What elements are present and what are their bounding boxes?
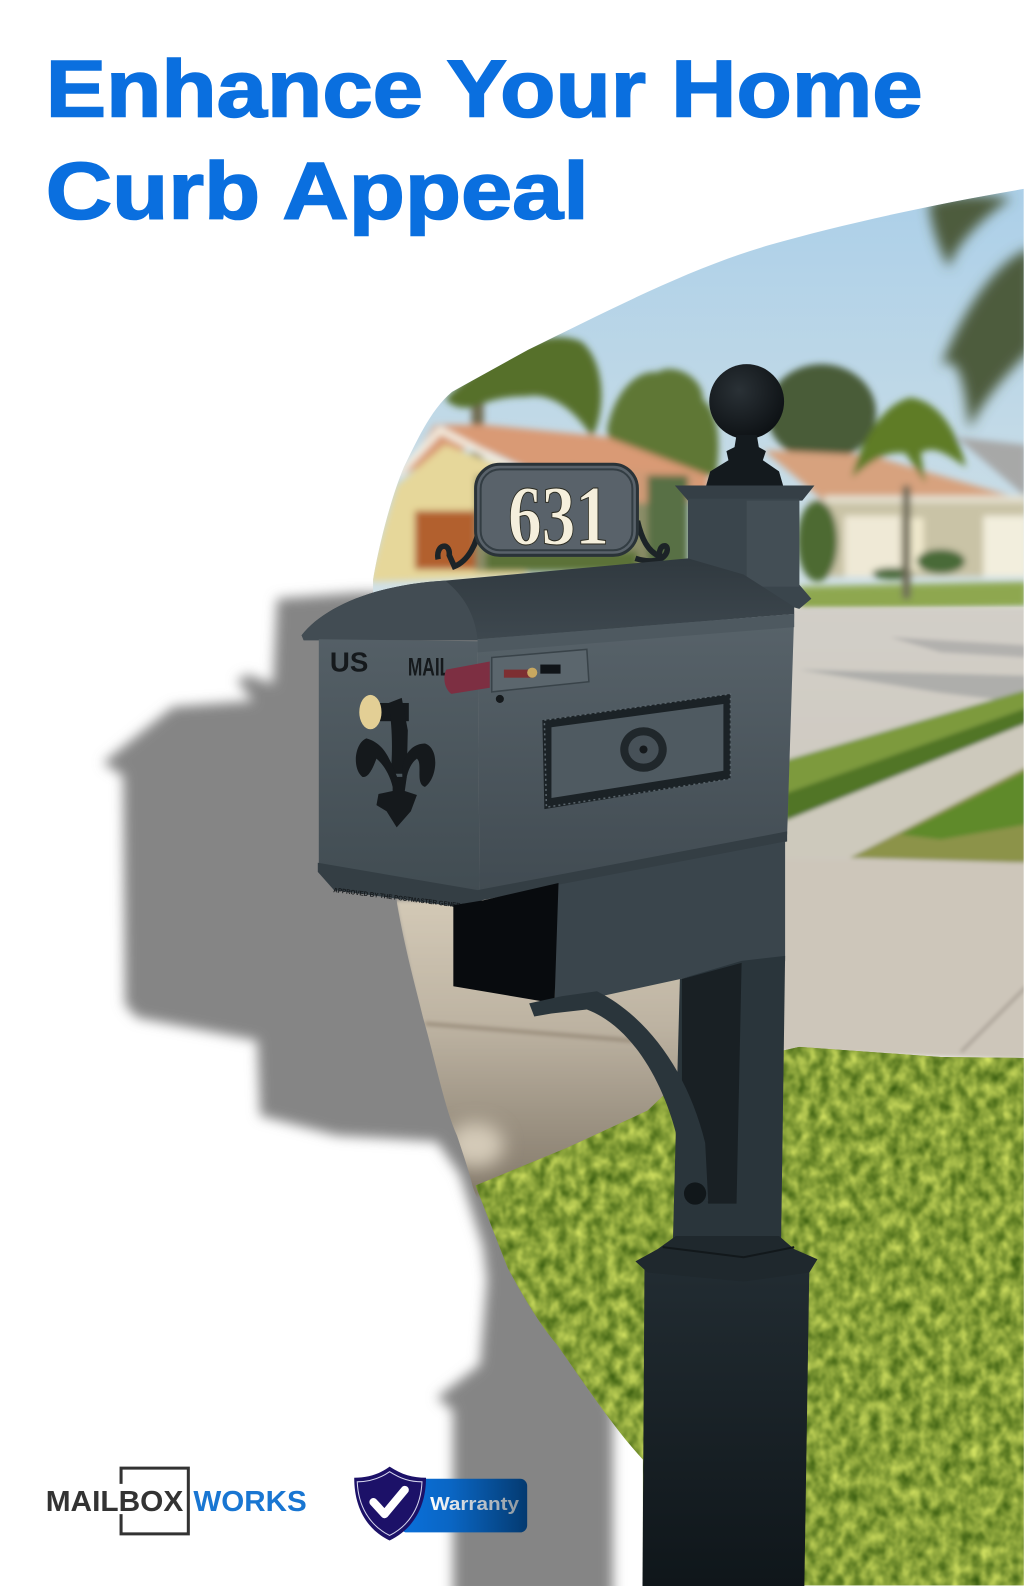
- lower road: [784, 860, 1024, 1060]
- logo wordmark blue: WORKS: [193, 1486, 307, 1518]
- background shadow of mailbox: [103, 593, 613, 1586]
- post shaft: [673, 956, 785, 1244]
- mailbox on post: [302, 364, 817, 1586]
- badge label: Warranty: [430, 1493, 520, 1514]
- dark right tree: [767, 364, 876, 461]
- base inscription: APPROVED BY THE POSTMASTER GENERAL: [333, 887, 469, 911]
- left house wall: [369, 445, 526, 582]
- left house roof: [400, 425, 708, 496]
- title line one: Enhance Your Home: [46, 44, 923, 134]
- brass knob: [359, 695, 409, 729]
- lower grass patch: [850, 767, 1024, 863]
- fleur-de-lis emblem: [356, 698, 435, 827]
- logo: Mailbox Works: [46, 1468, 307, 1534]
- bracket: [529, 991, 708, 1205]
- right house garage doors: [845, 516, 900, 577]
- lower parcel box: [554, 842, 785, 1006]
- plate number: 631: [508, 469, 609, 563]
- plate scrollwork: [438, 521, 667, 566]
- road joint: [425, 1024, 648, 1042]
- middle tree: [607, 369, 719, 475]
- US MAIL lettering: US: [330, 647, 368, 678]
- title line two: Curb Appeal: [46, 146, 589, 236]
- US MAIL lettering: MAIL: [408, 654, 450, 682]
- road shadows: [890, 637, 1024, 657]
- badge tab: [400, 1479, 527, 1532]
- sidewalk: [784, 723, 1024, 858]
- left palm trunk: [472, 389, 484, 501]
- lawn strip: [799, 582, 1024, 612]
- logo square: [121, 1468, 188, 1534]
- left palm fronds: [445, 337, 601, 437]
- latch plate: [492, 649, 589, 703]
- post cap: [675, 486, 814, 501]
- far right roof grey: [956, 437, 1024, 498]
- right palm trunk: [902, 486, 911, 599]
- road: [395, 607, 1024, 1214]
- middle house/tree base: [476, 475, 688, 571]
- shield icon: [354, 1467, 426, 1540]
- road left of post: [395, 900, 708, 1214]
- photo background: street and houses: [364, 182, 1024, 1586]
- door medallion: [620, 727, 667, 772]
- base post: [642, 1264, 809, 1586]
- bottom trim: [318, 831, 787, 910]
- road sunlit patch: [447, 1123, 504, 1167]
- ball finial: [706, 364, 784, 486]
- red flag: [444, 662, 490, 694]
- box left face: [319, 639, 480, 895]
- sky: [364, 182, 1024, 607]
- left garage: [415, 511, 478, 569]
- right house wall: [809, 501, 1024, 577]
- upper post: [688, 499, 811, 609]
- right house roof: [764, 450, 1024, 508]
- blurred scenery: [369, 337, 1024, 612]
- bushes: [797, 501, 838, 582]
- logo wordmark dark: MAILBOX: [46, 1486, 183, 1518]
- top right palm fronds: [929, 196, 1024, 429]
- right house fascia: [825, 496, 1024, 503]
- US MAIL lettering: [330, 647, 450, 682]
- box roof: [302, 558, 794, 640]
- number plate: [438, 464, 667, 566]
- foreground lawn: [471, 1042, 1024, 1586]
- title: [46, 44, 923, 236]
- upper grass band: [788, 688, 1024, 796]
- base collar: [635, 1236, 817, 1282]
- door panel: [542, 694, 730, 809]
- warranty badge: [354, 1467, 527, 1540]
- right palm fronds: [852, 398, 966, 483]
- box right face: [478, 614, 794, 892]
- left house gable white: [398, 430, 526, 475]
